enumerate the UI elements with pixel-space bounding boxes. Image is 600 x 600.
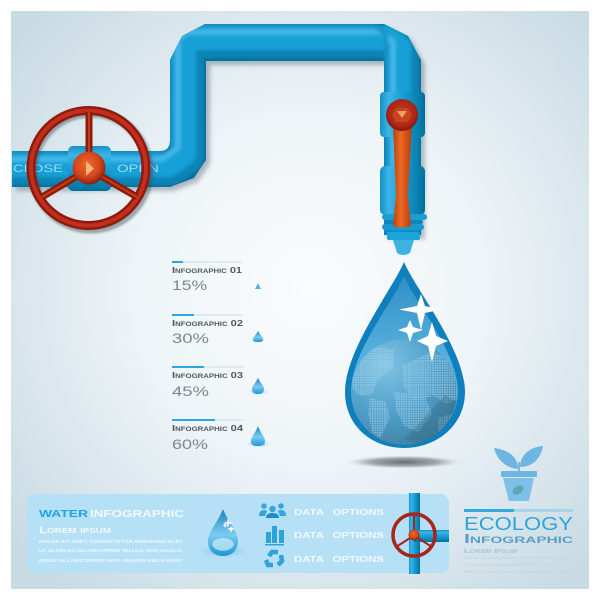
ecology heading block bbox=[464, 509, 574, 574]
lever knob bbox=[386, 99, 418, 131]
stat 1: 15% bbox=[172, 277, 207, 293]
lorem ipsum: Lorem ipsum bbox=[464, 548, 517, 555]
data option 3: DATA OPTIONS bbox=[294, 555, 385, 564]
stat 3: 45% bbox=[172, 383, 209, 399]
pipe labels close and open bbox=[13, 163, 159, 175]
data option 2: DATA OPTIONS bbox=[294, 531, 385, 540]
icon: people bbox=[259, 503, 286, 518]
stat 4 bbox=[172, 419, 270, 452]
pipe labels close and open: OPEN bbox=[117, 163, 159, 175]
banner pipe and valve bbox=[393, 493, 449, 574]
body text: UT ULTRICES ULLAMCORPER TELLUS, NON IACULIS bbox=[464, 563, 573, 567]
banner body text: DOLOR SIT AMET, CONSECTETUR ADIPISCING ELIIT. bbox=[39, 539, 183, 544]
banner heading bbox=[39, 508, 185, 520]
banner body text bbox=[39, 539, 183, 563]
bottom banner panel bbox=[27, 493, 449, 574]
infographic subtitle: Infographic bbox=[464, 532, 574, 546]
banner heading: INFOGRAPHIC bbox=[90, 508, 185, 520]
large water drop with globe bbox=[345, 262, 470, 468]
icon: banner water drop bbox=[198, 509, 248, 558]
pipe from wheel to tap bbox=[12, 24, 428, 242]
tap valve on vertical pipe bbox=[380, 92, 427, 255]
body text: DOLOR SIT AMET, CONSECTETUR ADIPISCING ELIIT. bbox=[464, 556, 572, 560]
banner heading: WATER bbox=[39, 508, 89, 520]
stat 2 bbox=[172, 314, 265, 346]
drop body bbox=[345, 262, 465, 448]
globe bbox=[351, 339, 457, 445]
stat 3 bbox=[172, 366, 268, 399]
data option 1: DATA OPTIONS bbox=[294, 508, 385, 517]
stat 4: 60% bbox=[172, 436, 208, 452]
stat 1 bbox=[172, 261, 261, 293]
wheel hub with play arrow bbox=[72, 152, 106, 184]
collar: wheel valve body bbox=[68, 146, 111, 191]
stat 4: Infographic 04 bbox=[172, 423, 243, 433]
body text bbox=[464, 556, 573, 574]
banner subtitle: Lorem ipsum bbox=[39, 525, 111, 536]
icon: bar chart bbox=[265, 526, 284, 546]
pipe labels close and open: CLOSE bbox=[13, 163, 63, 175]
sparkles bbox=[398, 294, 448, 362]
banner body text: UT ULTRICES ULLAMCORPER TELLUS, NON IACULIS bbox=[39, 548, 182, 553]
icon: recycle bbox=[266, 552, 282, 565]
body text: RISUS ULLAMCORPER NON. MAURIS FELIS ERAT. bbox=[464, 570, 572, 574]
red valve wheel bbox=[31, 110, 149, 229]
stat 2: Infographic 02 bbox=[172, 318, 243, 328]
orange tap lever bbox=[393, 125, 412, 228]
ecology title: ECOLOGY bbox=[464, 514, 573, 534]
stat list bbox=[172, 261, 270, 452]
banner body text: RISUS ULLAMCORPER NON. MAURIS FELIS ERAT. bbox=[39, 558, 183, 563]
icon: plant in pot bbox=[494, 446, 543, 501]
stat 3: Infographic 03 bbox=[172, 370, 243, 380]
stat 1: Infographic 01 bbox=[172, 265, 242, 275]
stat 2: 30% bbox=[172, 330, 209, 346]
